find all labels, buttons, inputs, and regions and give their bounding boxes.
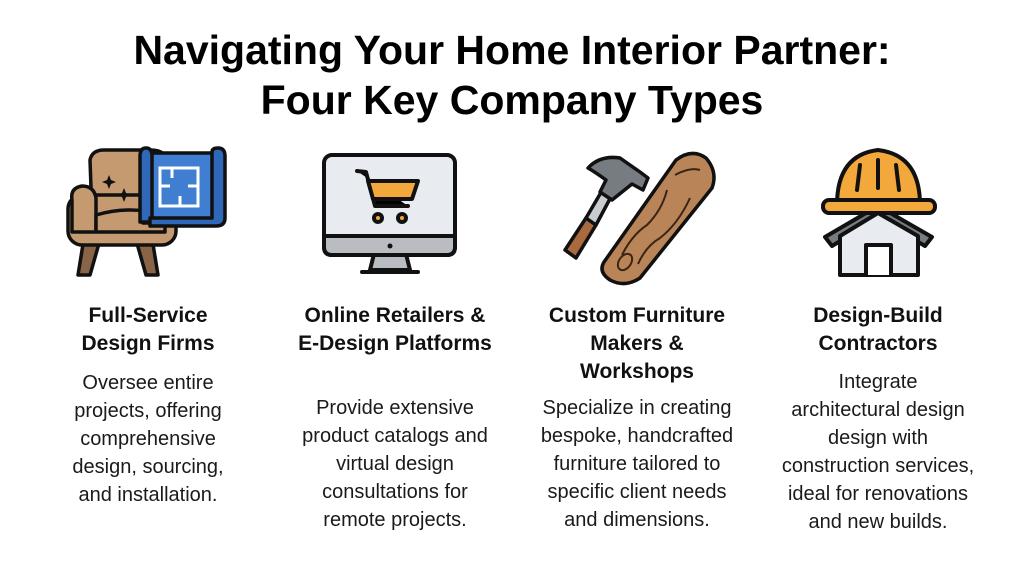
heading: online: E-Design Platforms <box>298 332 492 355</box>
heading: full-service <box>81 304 215 355</box>
text: design-build: architectural design <box>791 399 965 421</box>
icon: house with hard hat <box>823 150 935 275</box>
text: full-service: projects, offering <box>74 400 222 422</box>
heading: design-build <box>813 304 943 355</box>
text: custom furniture: and dimensions. <box>564 509 710 531</box>
icon: armchair with blueprint <box>68 148 225 275</box>
heading: custom furniture: Custom Furniture <box>549 304 725 327</box>
heading: design-build: Contractors <box>818 332 938 355</box>
text: online: product catalogs and <box>302 425 488 447</box>
text: online: virtual design <box>336 453 454 475</box>
title: Four Key Company Types <box>261 77 763 123</box>
text: design-build: and new builds. <box>808 511 947 533</box>
title: Navigating Your Home Interior Partner: <box>133 27 891 73</box>
heading: design-build: Design-Build <box>813 304 943 327</box>
text: design-build: design with <box>828 427 928 449</box>
text: full-service: and installation. <box>78 484 217 506</box>
text: design-build: construction services, <box>782 455 974 477</box>
heading: custom furniture <box>549 304 725 383</box>
text: full-service: design, sourcing, <box>72 456 224 478</box>
text: full-service: Oversee entire <box>82 372 214 394</box>
icon: hammer and wood log <box>565 153 714 284</box>
text: full-service: comprehensive <box>80 428 216 450</box>
heading: full-service: Full-Service <box>88 304 208 327</box>
heading: online <box>298 304 492 355</box>
heading: custom furniture: Makers & <box>590 332 684 355</box>
text: custom furniture: furniture tailored to <box>554 453 720 475</box>
text: online: Provide extensive <box>316 397 474 419</box>
text: design-build: Integrate <box>839 371 917 393</box>
icon: monitor with cart <box>324 155 455 272</box>
text: design-build <box>782 371 974 533</box>
heading: online: Online Retailers & <box>305 304 485 327</box>
text: online: consultations for <box>322 481 468 503</box>
text: online <box>302 397 488 531</box>
text: custom furniture: Specialize in creating <box>542 397 732 419</box>
text: custom furniture: specific client needs <box>548 481 726 503</box>
title <box>133 27 891 123</box>
heading: full-service: Design Firms <box>81 332 215 355</box>
text: online: remote projects. <box>323 509 467 531</box>
text: custom furniture <box>541 397 733 531</box>
text: custom furniture: bespoke, handcrafted <box>541 425 733 447</box>
text: full-service <box>72 372 224 506</box>
heading: custom furniture: Workshops <box>580 360 694 383</box>
text: design-build: ideal for renovations <box>788 483 968 505</box>
